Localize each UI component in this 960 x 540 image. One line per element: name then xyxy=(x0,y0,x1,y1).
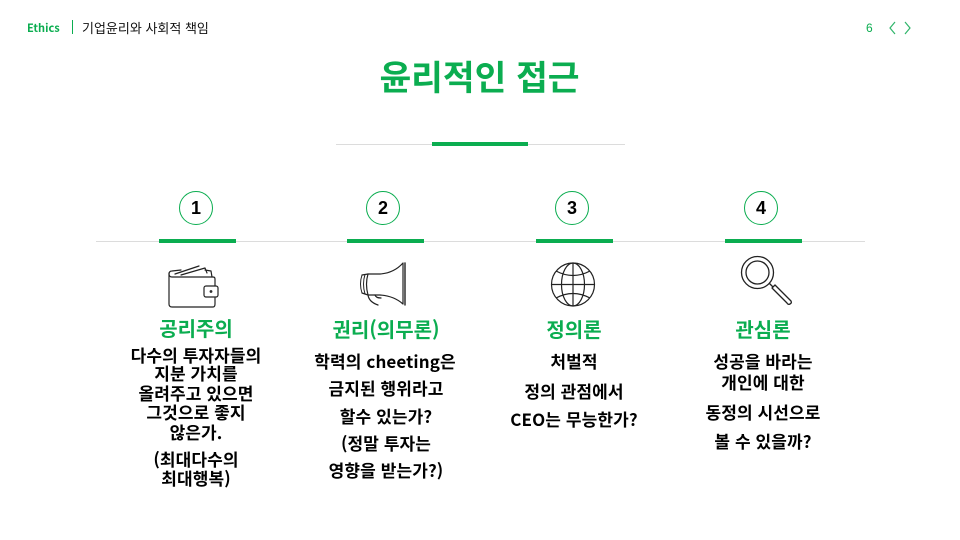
text: 권리 body: 할수 있는가? xyxy=(340,403,432,428)
text: 권리 body: (정말 투자는 xyxy=(341,430,431,455)
step number 4: 4 xyxy=(756,198,766,218)
text: 공리주의 body: 다수의 투자자들의 xyxy=(131,342,261,367)
title rule xyxy=(336,144,625,145)
step number 2 xyxy=(366,191,400,225)
text: 관심론 body: 성공을 바라는 xyxy=(713,348,813,373)
step number 3: 3 xyxy=(567,198,577,218)
heading: 공리주의: 공리주의 xyxy=(159,313,233,342)
header subject: 기업윤리와 사회적 책임 xyxy=(82,18,209,37)
text: 공리주의 body: 그것으로 좋지 xyxy=(146,399,246,424)
header: section label xyxy=(27,18,209,37)
text: 권리 body: 영향을 받는가?) xyxy=(329,457,443,482)
icon: globe xyxy=(550,262,596,307)
icon: wallet xyxy=(168,265,219,308)
step bar 2 xyxy=(347,239,424,243)
heading: 권리(의무론): 권리(의무론) xyxy=(332,314,440,343)
text: 관심론 body: 개인에 대한 xyxy=(721,369,805,394)
text: 관심론 body: 볼 수 있을까? xyxy=(714,428,812,453)
page number: 6 xyxy=(866,21,873,35)
text: 정의론 body: 처벌적 xyxy=(550,348,598,373)
text: 권리 body xyxy=(314,348,456,482)
text: 정의론 body xyxy=(510,348,638,431)
title accent bar xyxy=(432,142,528,146)
title: 윤리적인 접근 xyxy=(379,50,580,100)
text: 권리 body: 금지된 행위라고 xyxy=(328,375,444,400)
text: 공리주의 body: 지분 가치를 xyxy=(154,360,238,385)
step bar 1 xyxy=(159,239,236,243)
icon: megaphone xyxy=(360,262,406,306)
step number 1 xyxy=(179,191,213,225)
text: 공리주의 body: (최대다수의 xyxy=(153,446,239,471)
step bar 3 xyxy=(536,239,613,243)
text: 정의론 body: CEO는 무능한가? xyxy=(510,406,638,431)
icon: previous and next arrows xyxy=(889,22,911,34)
timeline rule xyxy=(96,241,865,242)
text: 공리주의 body: 올려주고 있으면 xyxy=(138,380,254,405)
heading: 정의론: 정의론 xyxy=(546,314,602,343)
step number 2: 2 xyxy=(378,198,388,218)
step number 1: 1 xyxy=(191,198,201,218)
text: 관심론 body xyxy=(705,348,821,453)
text: 공리주의 body xyxy=(131,342,261,490)
header divider xyxy=(72,20,73,34)
heading: 관심론: 관심론 xyxy=(735,314,791,343)
text: 관심론 body: 동정의 시선으로 xyxy=(705,399,821,424)
text: 공리주의 body: 최대행복) xyxy=(161,465,231,490)
step number 4 xyxy=(744,191,778,225)
label: Ethics: Ethics xyxy=(27,20,60,36)
text: 정의론 body: 정의 관점에서 xyxy=(524,378,624,403)
text: 공리주의 body: 않은가. xyxy=(170,419,222,444)
text: 권리 body: 학력의 cheeting은 xyxy=(314,348,456,373)
step number 3 xyxy=(555,191,589,225)
icon: magnifying glass xyxy=(740,256,792,305)
step bar 4 xyxy=(725,239,802,243)
